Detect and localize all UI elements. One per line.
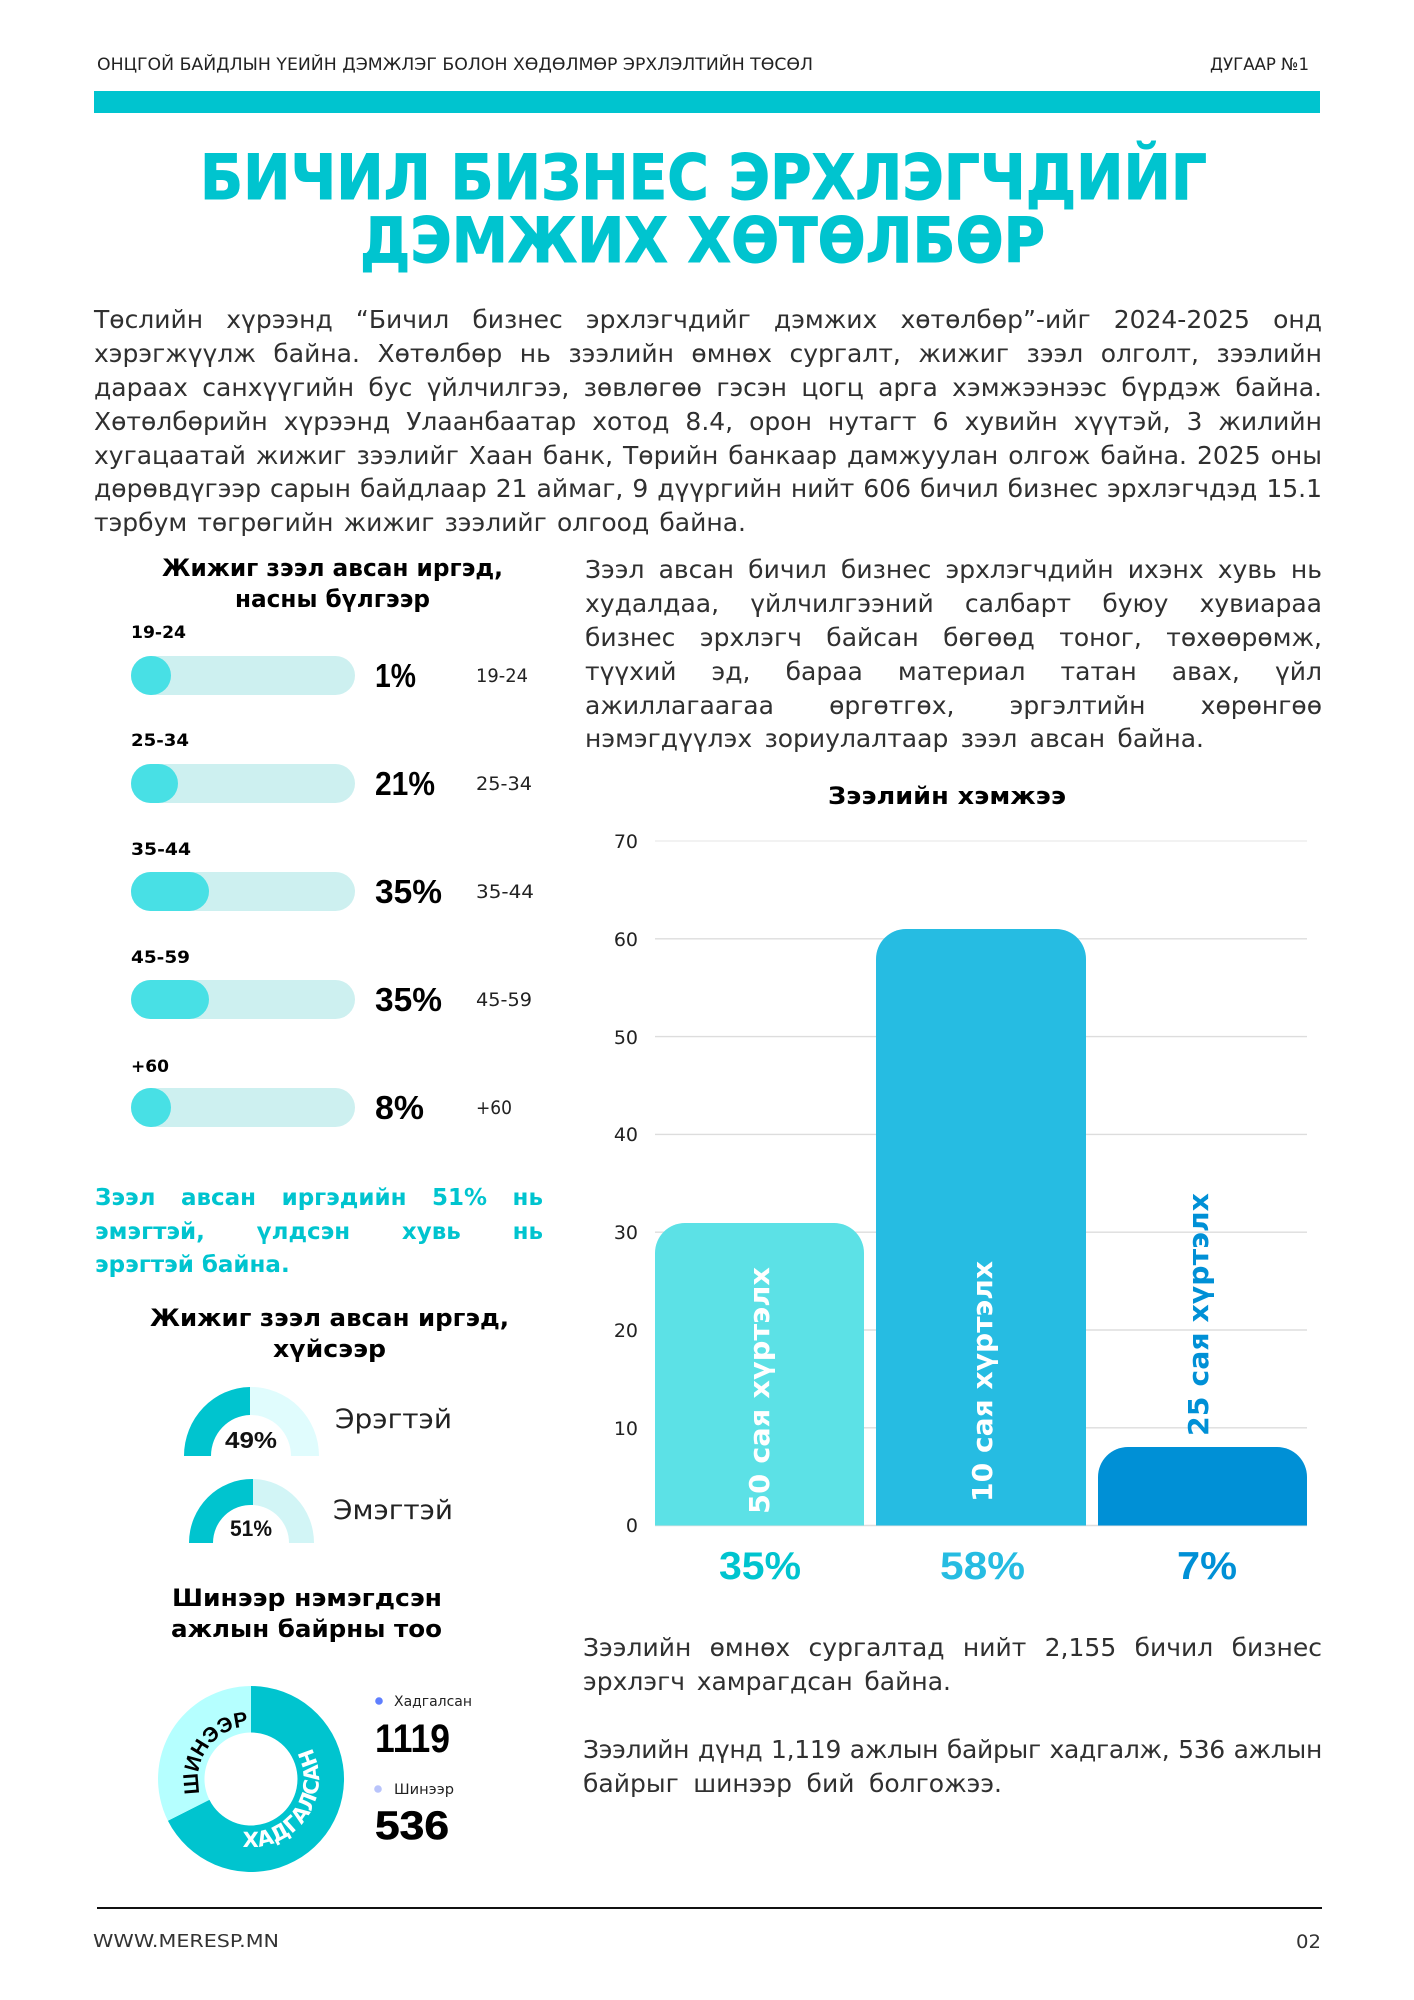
title xyxy=(200,141,1207,277)
jobs legend: 536 xyxy=(375,1804,449,1848)
age chart heading: насны бүлгээр xyxy=(235,585,430,613)
age row 35-44: 35% xyxy=(375,873,442,910)
intro paragraph: хэрэгжүүлж байна. Хөтөлбөр нь зээлийн өмнөх сургалт, жижиг зээл олголт, зээлийн xyxy=(94,339,1322,368)
age chart xyxy=(131,554,534,1127)
age row 45-59: 45-59 xyxy=(476,989,532,1011)
bar percentages: 35% xyxy=(719,1545,801,1588)
bottom paragraph: training: эрхлэгч хамрагдсан байна. xyxy=(583,1667,951,1696)
y axis labels: 0 xyxy=(626,1515,638,1537)
age row 19-24: 19-24 xyxy=(131,623,186,643)
intro paragraph xyxy=(94,305,1322,537)
half donut: female 51% xyxy=(189,1479,314,1543)
y axis labels: 60 xyxy=(614,929,638,951)
jobs legend: Шинээр xyxy=(394,1782,454,1798)
header teal bar xyxy=(94,91,1320,113)
y axis labels: 10 xyxy=(614,1418,638,1440)
header: project name: ОНЦГОЙ БАЙДЛЫН ҮЕИЙН ДЭМЖЛЭГ БОЛОН ХӨДӨЛМӨР ЭРХЛЭЛТИЙН ТӨСӨЛ xyxy=(97,53,813,75)
jobs heading: Шинээр нэмэгдсэн xyxy=(172,1584,442,1612)
intro paragraph: Төслийн хүрээнд “Бичил бизнес эрхлэгчдийг дэмжих хөтөлбөр”-ийг 2024-2025 онд xyxy=(94,305,1322,334)
age row 35-44: 35-44 xyxy=(131,840,191,860)
right column paragraph: худалдаа, үйлчилгээний салбарт буюу хувиараа xyxy=(585,589,1322,618)
age row 45-59: 35% xyxy=(375,981,442,1018)
bottom paragraph: jobs: байрыг шинээр бий болгожээ. xyxy=(583,1769,1002,1798)
age row 19-24 xyxy=(131,623,528,695)
right column paragraph: нэмэгдүүлэх зориулалтаар зээл авсан байна. xyxy=(585,724,1204,753)
gender callout: Зээл авсан иргэдийн 51% нь xyxy=(95,1185,543,1211)
right column paragraph: ажиллагаагаа өргөтгөх, эргэлтийн хөрөнгөө xyxy=(585,691,1322,720)
age row +60: +60 xyxy=(131,1057,169,1077)
jobs heading xyxy=(171,1584,442,1643)
header: issue number: ДУГААР №1 xyxy=(1210,55,1309,75)
bar: 25 million xyxy=(1098,1193,1307,1526)
gender callout xyxy=(95,1185,543,1278)
gender heading xyxy=(150,1304,509,1363)
y axis labels: 30 xyxy=(614,1222,638,1244)
y axis labels xyxy=(614,831,638,1537)
label: female: Эмэгтэй xyxy=(333,1495,453,1526)
bottom paragraph: jobs: Зээлийн дүнд 1,119 ажлын байрыг хадгалж, 536 ажлын xyxy=(583,1735,1322,1764)
half donut: male 49%: 49% xyxy=(225,1427,277,1453)
chart title: Зээлийн хэмжээ xyxy=(828,782,1066,810)
jobs legend: Хадгалсан xyxy=(394,1694,472,1710)
y axis labels: 40 xyxy=(614,1124,638,1146)
age row 25-34: 25-34 xyxy=(131,731,189,751)
jobs donut chart xyxy=(158,1686,344,1872)
age row +60 xyxy=(131,1057,512,1127)
age row +60: 8% xyxy=(375,1089,424,1126)
y axis labels: 70 xyxy=(614,831,638,853)
jobs heading: ажлын байрны тоо xyxy=(171,1615,442,1643)
age row 25-34 xyxy=(131,731,532,803)
age row +60: +60 xyxy=(476,1097,512,1119)
age row 25-34: 21% xyxy=(375,765,435,802)
half donut: female 51%: 51% xyxy=(230,1516,272,1541)
bar: 10 million xyxy=(876,929,1086,1526)
intro paragraph: дараах санхүүгийн бус үйлчилгээ, зөвлөгөө гэсэн цогц арга хэмжээнээс бүрдэж байна. xyxy=(94,373,1322,402)
right column paragraph xyxy=(585,555,1322,753)
jobs legend: 1119 xyxy=(375,1717,450,1761)
age row 45-59 xyxy=(131,948,532,1019)
bar: 50 million xyxy=(655,1223,864,1526)
intro paragraph: дөрөвдүгээр сарын байдлаар 21 аймаг, 9 дүүргийн нийт 606 бичил бизнес эрхлэгчдэд 15.1 xyxy=(94,474,1322,503)
age row 35-44 xyxy=(131,840,534,911)
gender callout: эмэгтэй, үлдсэн хувь нь xyxy=(95,1218,543,1244)
right column paragraph: Зээл авсан бичил бизнес эрхлэгчдийн ихэнх хувь нь xyxy=(585,555,1322,584)
label: male: Эрэгтэй xyxy=(335,1404,452,1435)
bar: 50 million: 50 сая хүртэлх xyxy=(743,1267,776,1514)
jobs legend xyxy=(374,1694,472,1848)
intro paragraph: Хөтөлбөрийн хүрээнд Улаанбаатар хотод 8.4, орон нутагт 6 хувийн хүүтэй, 3 жилийн xyxy=(94,407,1322,436)
bottom paragraph: jobs xyxy=(583,1735,1322,1798)
age row 45-59: 45-59 xyxy=(131,948,190,968)
title: БИЧИЛ БИЗНЕС ЭРХЛЭГЧДИЙГ xyxy=(200,141,1207,214)
footer website: WWW.MERESP.MN xyxy=(93,1931,279,1952)
bar percentages: 7% xyxy=(1177,1545,1237,1588)
age chart heading: Жижиг зээл авсан иргэд, xyxy=(162,554,503,582)
jobs donut chart: ХАДГАЛСАН xyxy=(243,1749,320,1847)
jobs donut chart: ШИНЭЭР xyxy=(183,1712,246,1794)
gender heading: Жижиг зээл авсан иргэд, xyxy=(150,1304,509,1332)
footer page number: 02 xyxy=(1296,1931,1321,1953)
bottom paragraph: training: Зээлийн өмнөх сургалтад нийт 2,155 бичил бизнес xyxy=(583,1633,1322,1662)
age row 19-24: 19-24 xyxy=(476,665,528,687)
half donut: male 49% xyxy=(184,1387,319,1456)
age row 25-34: 25-34 xyxy=(476,773,532,795)
bar percentages: 58% xyxy=(940,1545,1025,1588)
title: ДЭМЖИХ ХӨТӨЛБӨР xyxy=(360,204,1045,277)
age row 19-24: 1% xyxy=(375,657,416,694)
bar percentages xyxy=(719,1545,1237,1588)
age chart heading xyxy=(162,554,503,613)
gender callout: эрэгтэй байна. xyxy=(95,1252,290,1278)
loan size chart xyxy=(614,782,1307,1588)
gender heading: хүйсээр xyxy=(273,1335,386,1363)
bottom paragraph: training xyxy=(583,1633,1322,1696)
y axis labels: 20 xyxy=(614,1320,638,1342)
right column paragraph: түүхий эд, бараа материал татан авах, үйл xyxy=(585,657,1322,686)
intro paragraph: хугацаатай жижиг зээлийг Хаан банк, Төрийн банкаар дамжуулан олгож байна. 2025 оны xyxy=(94,441,1322,470)
y axis labels: 50 xyxy=(614,1027,638,1049)
bar: 10 million: 10 сая хүртэлх xyxy=(966,1261,999,1502)
footer rule xyxy=(97,1907,1322,1909)
age row 35-44: 35-44 xyxy=(476,881,534,903)
bar: 25 million: 25 сая хүртэлх xyxy=(1182,1193,1215,1436)
right column paragraph: бизнес эрхлэгч байсан бөгөөд тоног, төхөөрөмж, xyxy=(585,623,1322,652)
intro paragraph: тэрбум төгрөгийн жижиг зээлийг олгоод байна. xyxy=(94,508,746,537)
